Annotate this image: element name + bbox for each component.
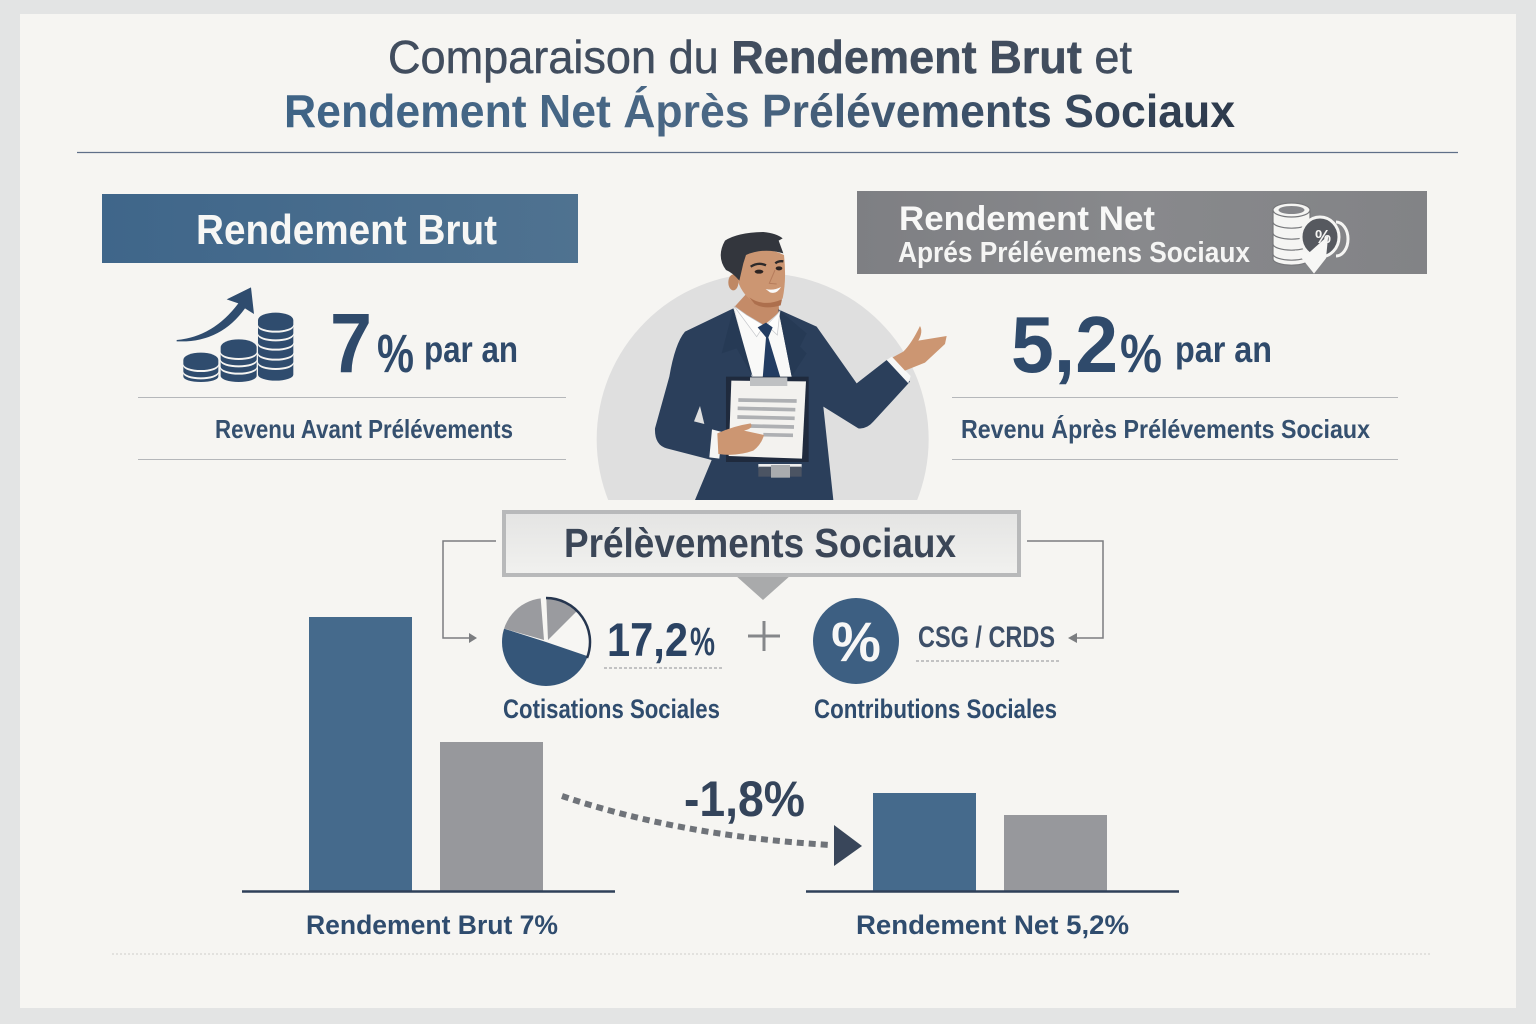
value: 17,2%: 17,2	[607, 613, 688, 666]
icon: percent badge	[813, 598, 899, 684]
icon: coins and percent tag: %	[1315, 227, 1331, 247]
icon: percent badge: %	[831, 610, 881, 673]
label: cotisations sociales: Cotisations Sociales	[503, 694, 720, 724]
header: rendement net: Rendement Net	[899, 200, 1155, 238]
backdrop circle	[596, 275, 928, 500]
belt	[758, 464, 802, 468]
panel: prelevements sociaux	[443, 512, 1103, 724]
brows and eyes	[751, 261, 783, 267]
head	[737, 249, 785, 305]
bar chart: rendement net	[806, 793, 1179, 940]
arrow: right connector	[1027, 541, 1103, 643]
icon: coins and percent tag	[1273, 203, 1348, 272]
icon: coins with rising arrow	[177, 287, 293, 382]
plus sign	[748, 621, 780, 651]
ear	[728, 274, 738, 290]
label: rendement brut 7%: Rendement Brut 7%	[306, 910, 558, 940]
arrow: gross to net difference	[562, 796, 862, 866]
illustration: businessman presenting	[596, 232, 947, 500]
header: rendement brut: Rendement Brut	[196, 206, 497, 253]
panel: rendement net	[857, 191, 1427, 460]
hair	[721, 232, 783, 281]
title: Comparaison du Rendement Brut et	[388, 31, 1132, 83]
caption: revenu avant: Revenu Avant Prélévements	[215, 414, 513, 444]
right hand	[893, 326, 947, 371]
value: -1,8%: -1,8%	[684, 771, 805, 827]
shirt	[734, 306, 794, 380]
value: 5,2% par an: par an	[1175, 329, 1272, 370]
left cuff	[709, 429, 722, 459]
jacket	[655, 308, 910, 500]
heading box	[504, 512, 1019, 600]
arrow: left connector	[443, 541, 496, 643]
neck	[734, 293, 779, 335]
label: csg crds: CSG / CRDS	[918, 621, 1055, 654]
right cuff	[887, 357, 911, 383]
label: contributions sociales: Contributions Sociales	[814, 694, 1057, 724]
title	[284, 31, 1235, 137]
lapels	[722, 308, 753, 377]
header: rendement net	[857, 191, 1427, 274]
title: Rendement Net Áprès Prélévements Sociaux	[284, 85, 1235, 137]
tie	[758, 323, 781, 378]
value: 7% par an: par an	[424, 329, 518, 370]
jaw shadow	[749, 297, 782, 307]
header: rendement brut	[102, 194, 578, 263]
arm gap	[694, 406, 704, 424]
left hand	[717, 423, 764, 455]
panel: rendement brut	[102, 194, 578, 460]
caption: revenu apres: Revenu Áprès Prélévements Sociaux	[961, 414, 1370, 444]
value: 5,2% par an: %	[1120, 324, 1162, 384]
smile	[766, 287, 781, 293]
value: 17,2%: %	[690, 620, 715, 664]
clipboard lines	[737, 400, 797, 435]
clipboard	[726, 377, 809, 462]
value: 7% par an: 7	[330, 296, 372, 390]
shirt collar	[734, 306, 780, 337]
bar chart: rendement brut	[242, 617, 615, 940]
icon: pie chart	[502, 596, 592, 686]
value: 5,2% par an: 5,2	[1011, 300, 1118, 389]
value: 7% par an	[330, 296, 518, 390]
value: 5,2% par an	[1011, 300, 1272, 389]
value: 7% par an: %	[377, 324, 414, 384]
heading box: Prélèvements Sociaux	[564, 520, 956, 566]
header: rendement net: Aprés Prélévemens Sociaux	[898, 237, 1250, 269]
label: rendement net 5,2%: Rendement Net 5,2%	[856, 910, 1129, 940]
